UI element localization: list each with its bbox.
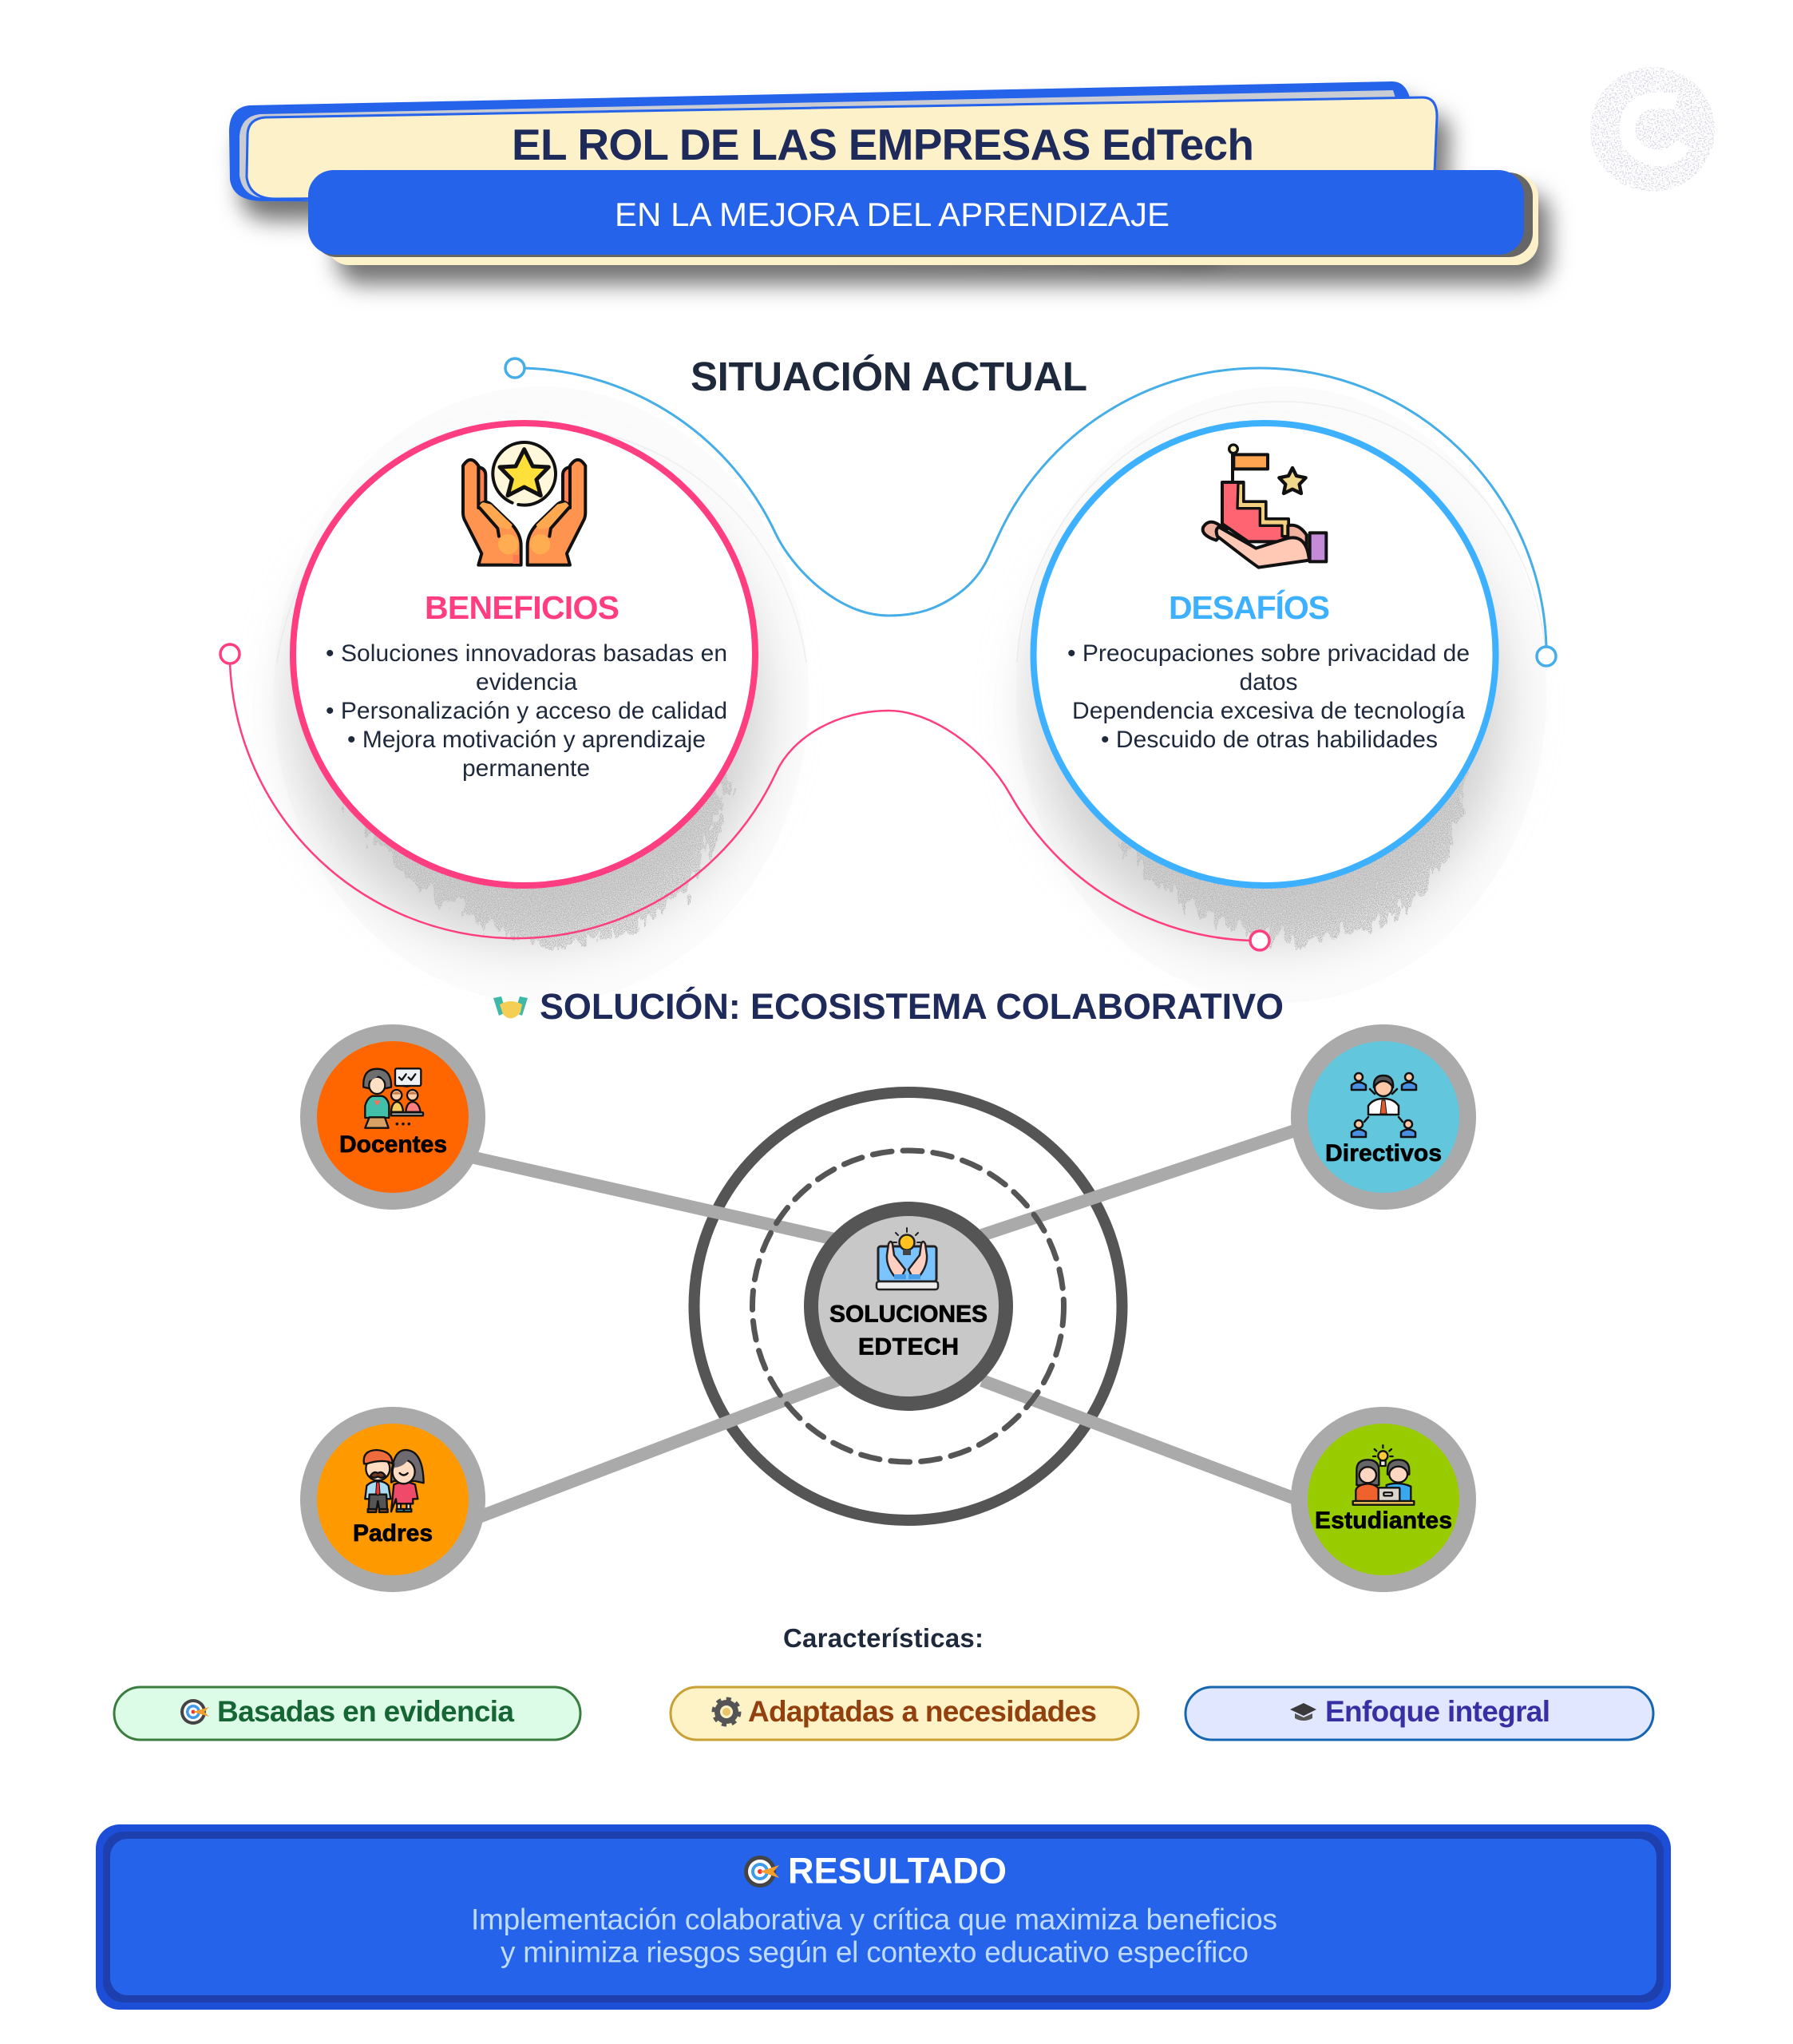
list: evidencia [476, 669, 577, 695]
ring [293, 423, 755, 885]
list: datos [1239, 669, 1298, 695]
heading: BENEFICIOS [425, 589, 619, 626]
pill: basadas en evidencia: Basadas en evidencia [217, 1695, 514, 1728]
list [1067, 640, 1470, 753]
pill: adaptadas a necesidades [671, 1687, 1138, 1740]
icon: handshake [493, 996, 528, 1019]
subtitle: EN LA MEJORA DEL APRENDIZAJE [615, 196, 1170, 233]
node: center: EDTECH [858, 1333, 959, 1361]
list: • Descuido de otras habilidades [1101, 727, 1438, 753]
list: • Soluciones innovadoras basadas en [326, 640, 727, 667]
node: docentes [308, 1033, 477, 1201]
panel: resultado [96, 1824, 1671, 2010]
node: directivos [1300, 1033, 1467, 1201]
icon: teacher [363, 1068, 423, 1128]
cream title panel [247, 97, 1437, 199]
lower cream layer [326, 173, 1538, 265]
list [326, 640, 727, 782]
node: directivos: Directivos [1325, 1140, 1442, 1167]
node: padres [308, 1415, 477, 1584]
node: center [811, 1209, 1006, 1404]
list: permanente [462, 755, 590, 782]
icon: target [744, 1856, 779, 1888]
description: Implementación colaborativa y crítica que maximiza beneficios [471, 1903, 1277, 1935]
title: EL ROL DE LAS EMPRESAS EdTech [512, 120, 1254, 169]
diagram: ecosystem [308, 1033, 1467, 1584]
icon: hand holding stairs [1203, 445, 1326, 568]
label: SOLUCIONES [829, 1301, 988, 1327]
back blue panel [229, 81, 1437, 240]
heading: DESAFÍOS [1169, 589, 1330, 626]
watermark [1590, 67, 1715, 192]
list: • Mejora motivación y aprendizaje [347, 727, 706, 753]
connector lines [471, 1130, 1297, 1517]
list: • Personalización y acceso de calidad [326, 698, 727, 724]
title banner [229, 81, 1538, 265]
description: y minimiza riesgos según el contexto educativo específico [501, 1935, 1249, 1969]
node: docentes: Docentes [339, 1131, 447, 1158]
connector: blue curve [505, 358, 1556, 666]
panel: beneficios [293, 423, 755, 885]
ring [1033, 423, 1496, 885]
icon: graduation cap [1290, 1703, 1316, 1721]
node: padres: Padres [353, 1520, 433, 1547]
outer ring [695, 1092, 1122, 1520]
connector: pink curve [220, 644, 1269, 950]
description [471, 1903, 1277, 1969]
subtitle bar [308, 170, 1524, 255]
pill: enfoque integral [1185, 1687, 1653, 1740]
list: • Preocupaciones sobre privacidad de [1067, 640, 1470, 667]
icon: hands holding star [463, 430, 585, 565]
node: estudiantes [1300, 1415, 1467, 1584]
panel: desafíos [1033, 423, 1496, 885]
heading: solución: SOLUCIÓN: ECOSISTEMA COLABORATIVO [540, 986, 1284, 1027]
icon: gear [714, 1699, 739, 1725]
icon: target [180, 1699, 209, 1725]
icon: laptop with hands and bulb [877, 1228, 938, 1289]
list: Dependencia excesiva de tecnología [1072, 698, 1465, 724]
shadow: benefits circle [274, 386, 809, 1003]
icon: parents [364, 1450, 424, 1512]
icon: students [1353, 1445, 1414, 1505]
caption: características: Características: [783, 1623, 984, 1653]
icon: managers [1352, 1073, 1416, 1137]
shadow: challenges circle [1016, 386, 1546, 1003]
heading: RESULTADO [788, 1851, 1007, 1891]
pill: enfoque integral: Enfoque integral [1325, 1695, 1550, 1728]
node: estudiantes: Estudiantes [1315, 1507, 1452, 1534]
pill: adaptadas a necesidades: Adaptadas a necesidades [748, 1695, 1097, 1728]
dashed ring [752, 1151, 1063, 1462]
heading: situación actual: SITUACIÓN ACTUAL [691, 354, 1087, 399]
pill: basadas en evidencia [114, 1687, 580, 1740]
